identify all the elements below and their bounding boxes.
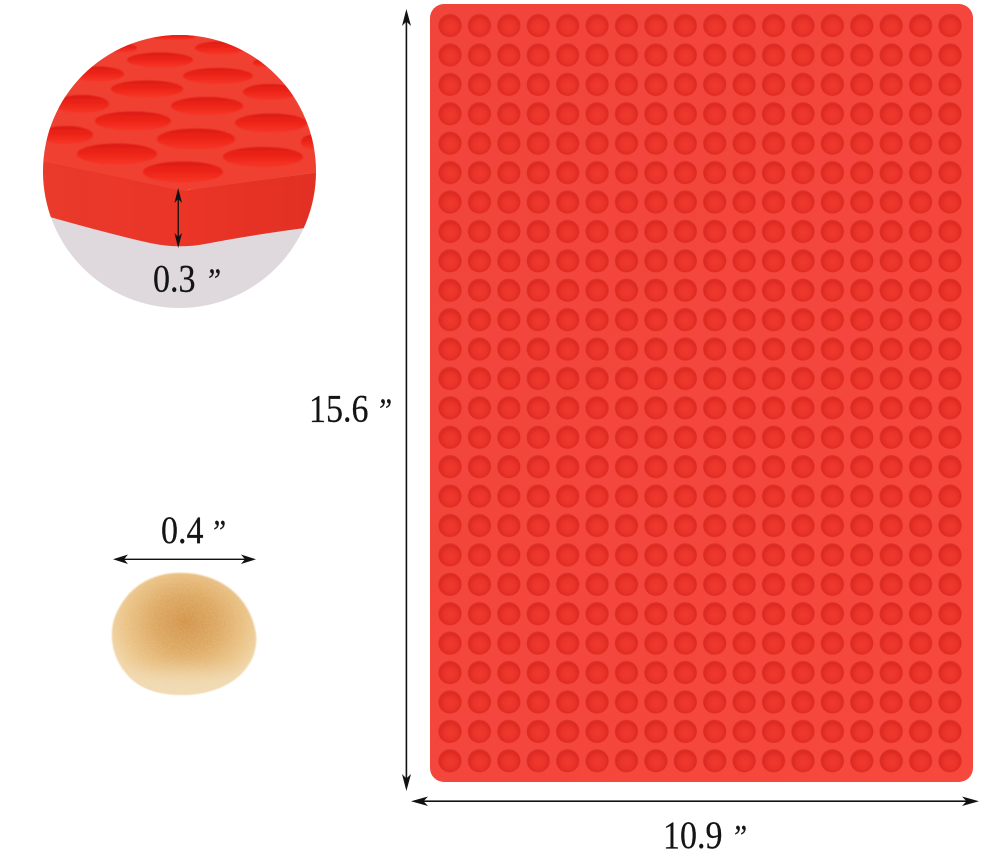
grid of hemisphere cavities — [435, 11, 965, 776]
arrow: mat height — [402, 9, 411, 791]
label: 10.9 inch: ” — [731, 818, 747, 855]
background below mat — [40, 30, 320, 312]
top surface — [40, 30, 320, 191]
panel: red silicone mat — [430, 4, 973, 782]
arrow: bun width — [113, 554, 256, 564]
label: 10.9 inch: 10.9 — [663, 813, 722, 856]
panel: thickness close-up circle — [39, 30, 323, 312]
mat side wall — [40, 160, 320, 246]
label: 0.3 inch: ” — [205, 262, 221, 299]
label: 0.3 inch: 0.3 — [153, 256, 195, 300]
bun shading and crumb texture — [118, 574, 253, 695]
label: 0.4 inch: ” — [210, 513, 226, 550]
label: 15.6 inch: ” — [376, 392, 392, 429]
arrow: mat width — [411, 796, 979, 806]
icon: baked bun — [111, 572, 258, 696]
arrow: thickness — [174, 188, 182, 248]
label: 0.4 inch: 0.4 — [161, 508, 203, 552]
holes — [39, 34, 323, 182]
pale underside — [134, 664, 234, 695]
speckled crumb — [118, 574, 253, 674]
bun body — [112, 573, 256, 695]
label: 15.6 inch: 15.6 — [309, 386, 368, 430]
mat base — [430, 4, 973, 782]
